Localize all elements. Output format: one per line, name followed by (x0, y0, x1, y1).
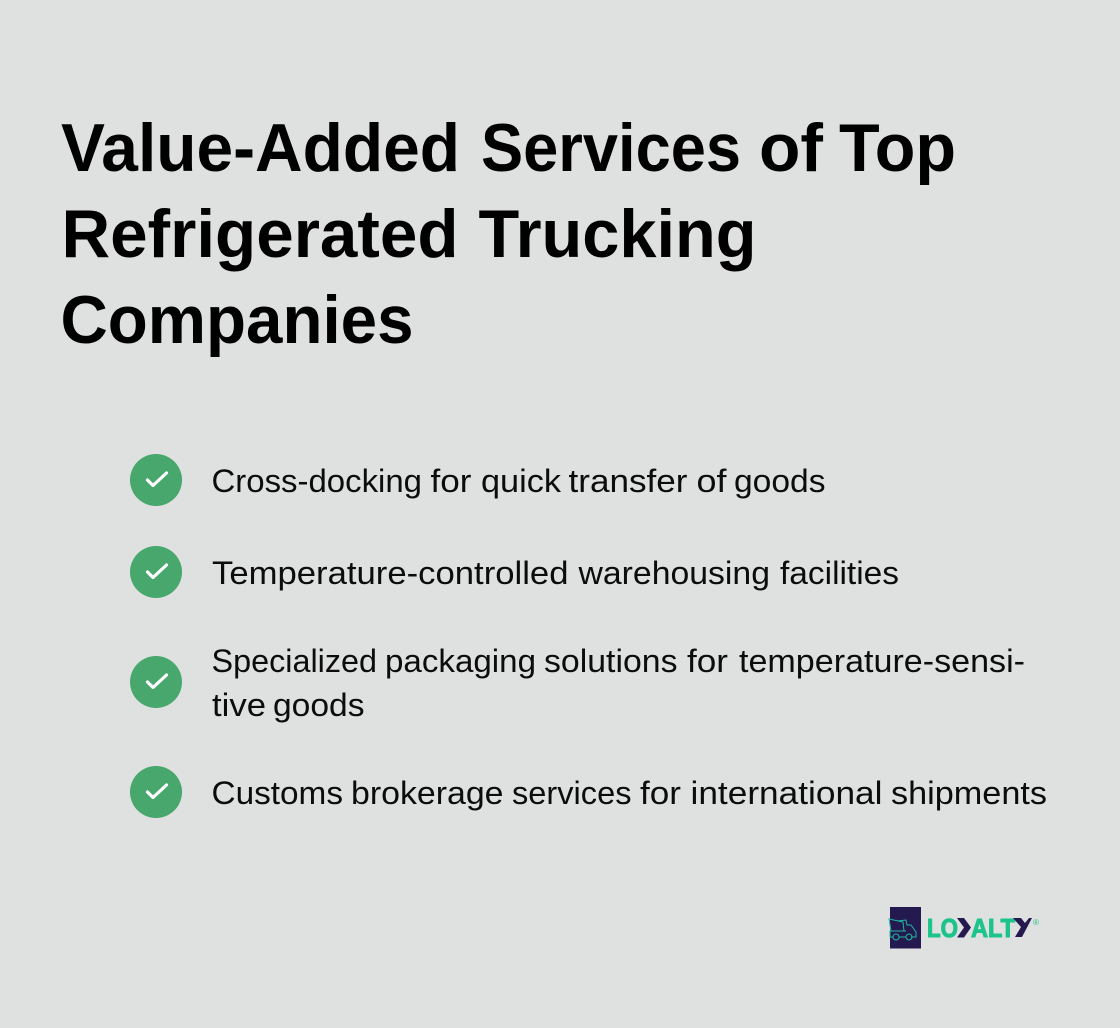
list item: packaging: goods (273, 687, 364, 723)
list item: packaging: solutions (544, 643, 678, 679)
icon: check badge (130, 454, 182, 506)
list item: cross-docking: Cross-docking (212, 463, 422, 499)
list item: warehousing: warehousing (577, 555, 770, 591)
list item: cross-docking: for (430, 463, 472, 499)
list item: customs: Customs (212, 775, 343, 811)
list item: customs: international (690, 775, 882, 811)
logo wordmark: ® (1033, 918, 1039, 927)
list item: cross-docking: transfer (568, 463, 688, 499)
list item: packaging (130, 643, 1025, 723)
title (60, 110, 956, 358)
list item: warehousing: facilities (780, 555, 899, 591)
list item: packaging: for (687, 643, 728, 679)
icon: check badge (130, 656, 182, 708)
list item: cross-docking (130, 454, 826, 506)
list item: customs (130, 766, 1047, 818)
list item: packaging: packaging (385, 643, 536, 679)
title: Companies (60, 282, 414, 358)
list item: warehousing: Temperature-controlled (212, 555, 568, 591)
list item: warehousing (130, 546, 899, 598)
icon: check badge (130, 766, 182, 818)
list item: cross-docking: quick (481, 463, 562, 499)
list item: packaging: tive (212, 687, 266, 723)
list item: customs: for (640, 775, 681, 811)
logo: Loyalty (889, 907, 1039, 948)
list item: cross-docking: goods (734, 463, 826, 499)
title: Trucking (478, 196, 756, 272)
list item: packaging: Specialized (212, 643, 377, 679)
list item: cross-docking: of (696, 463, 728, 499)
list item: packaging: temperature-sensi- (739, 643, 1025, 679)
icon: truck on navy square (889, 907, 921, 948)
title: Services (481, 110, 741, 186)
title: of (759, 110, 823, 186)
logo wordmark: LO (927, 913, 958, 943)
logo wordmark: ALT (971, 913, 1015, 943)
list item: customs: services (512, 775, 632, 811)
list item: customs: brokerage (351, 775, 504, 811)
title: Refrigerated (62, 196, 458, 272)
icon: check badge (130, 546, 182, 598)
list item: customs: shipments (891, 775, 1047, 811)
title: Top (839, 110, 956, 186)
logo wordmark (927, 913, 1039, 943)
title: Value-Added (61, 110, 460, 186)
